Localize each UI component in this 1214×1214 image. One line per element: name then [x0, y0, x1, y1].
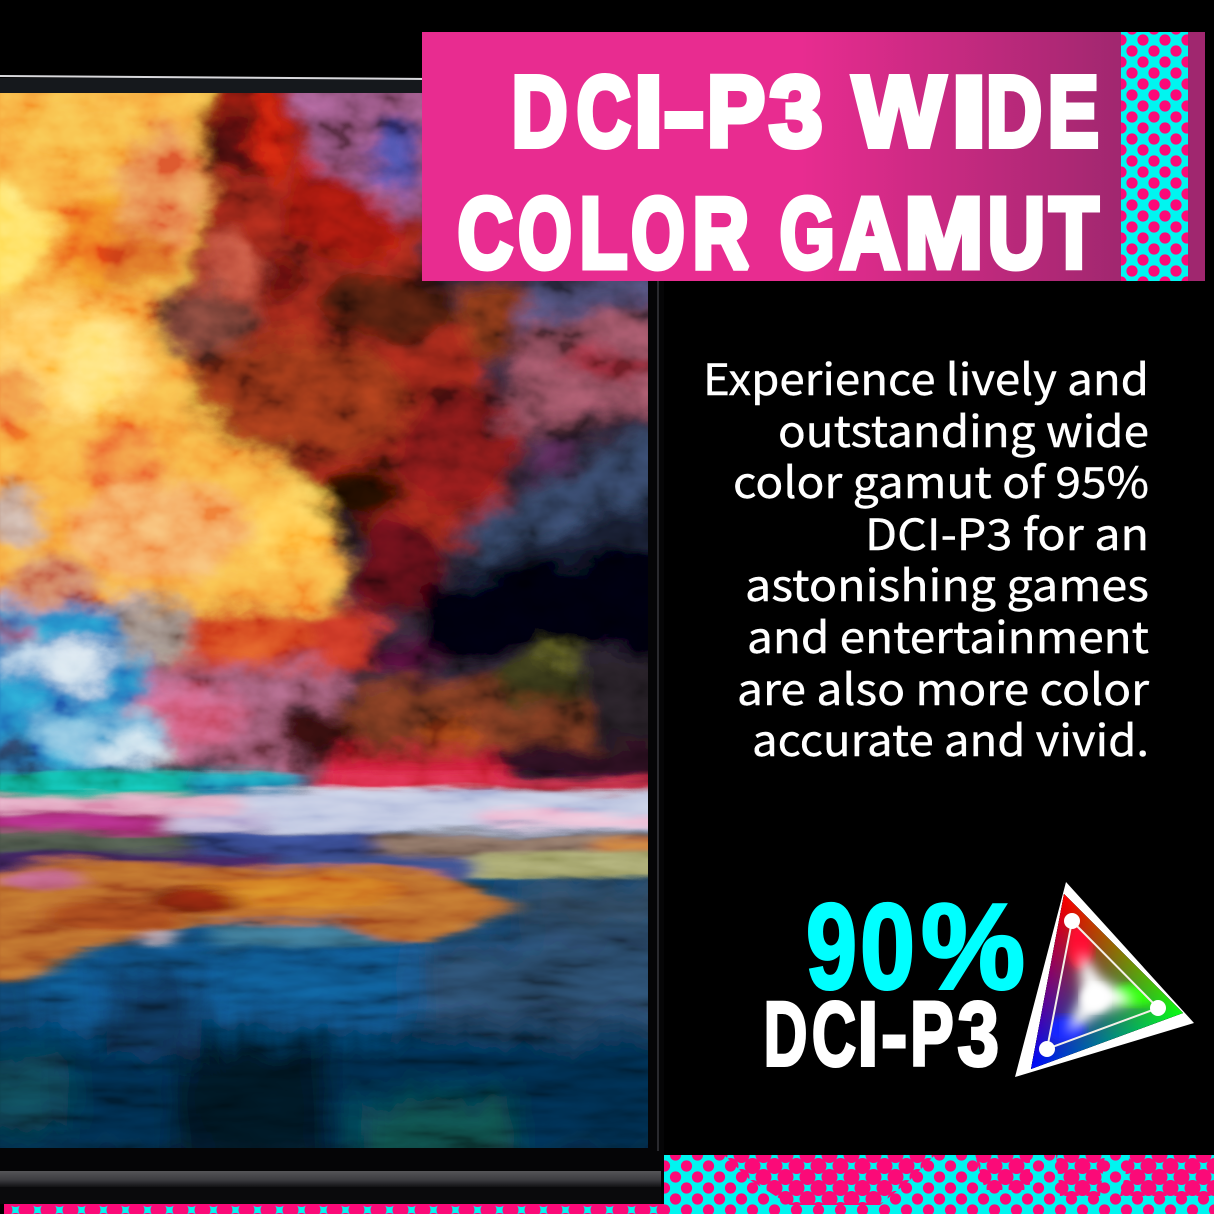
headline text: D	[512, 56, 568, 168]
headline text	[458, 56, 1099, 290]
headline text: R	[692, 178, 749, 290]
halftone strip	[1121, 32, 1188, 281]
orange land	[0, 862, 520, 985]
headline text: D	[986, 56, 1042, 168]
DCI-P3 label: D	[764, 984, 808, 1086]
headline text: W	[853, 56, 946, 168]
headline text: P	[707, 56, 765, 168]
monitor frame	[0, 75, 664, 1204]
red mass	[175, 70, 520, 560]
body paragraph: DCI-P3 for an	[865, 501, 1149, 563]
headline text: 3	[769, 56, 822, 168]
90% figure: 0	[860, 878, 915, 1014]
body paragraph: astonishing games	[745, 552, 1149, 614]
headline text: I	[634, 56, 663, 168]
upper left golden mass	[0, 70, 345, 640]
DCI-P3 label: P	[910, 984, 954, 1086]
headline text: -	[663, 56, 704, 168]
headline text: O	[518, 178, 572, 290]
icon: colour gamut triangle	[1015, 882, 1194, 1077]
body paragraph: Experience lively and	[703, 346, 1149, 408]
body paragraph: color gamut of 95%	[733, 449, 1149, 511]
headline text: L	[580, 178, 627, 290]
headline text: A	[840, 178, 900, 290]
body paragraph: outstanding wide	[778, 398, 1149, 460]
upper purple	[286, 70, 440, 220]
lower blue body	[0, 830, 648, 1148]
DCI-P3 label: 3	[957, 984, 999, 1086]
headline text: U	[988, 178, 1045, 290]
headline text: T	[1049, 178, 1098, 290]
right side	[498, 281, 648, 346]
teal, red and pink streaks	[0, 772, 280, 796]
body paragraph: are also more color	[737, 656, 1149, 718]
bottom halftone band	[4, 1155, 1214, 1214]
headline text: G	[780, 178, 835, 290]
body paragraph	[703, 346, 1149, 769]
body paragraph: and entertainment	[747, 604, 1149, 666]
headline text: M	[904, 178, 983, 290]
headline banner	[422, 32, 1205, 281]
DCI-P3 label: I	[857, 984, 879, 1086]
90% figure: 9	[806, 878, 857, 1014]
headline text: C	[577, 56, 631, 168]
headline text: O	[631, 178, 685, 290]
DCI-P3 label: -	[881, 984, 908, 1086]
90% figure: %	[921, 878, 1025, 1014]
DCI-P3 label: C	[812, 984, 856, 1086]
monitor screen: abstract colour clouds	[0, 93, 648, 1148]
body paragraph: accurate and vivid.	[752, 707, 1149, 769]
centre band	[170, 610, 375, 670]
headline text: C	[458, 178, 513, 290]
headline text: E	[1048, 56, 1099, 168]
headline text: I	[951, 56, 987, 168]
